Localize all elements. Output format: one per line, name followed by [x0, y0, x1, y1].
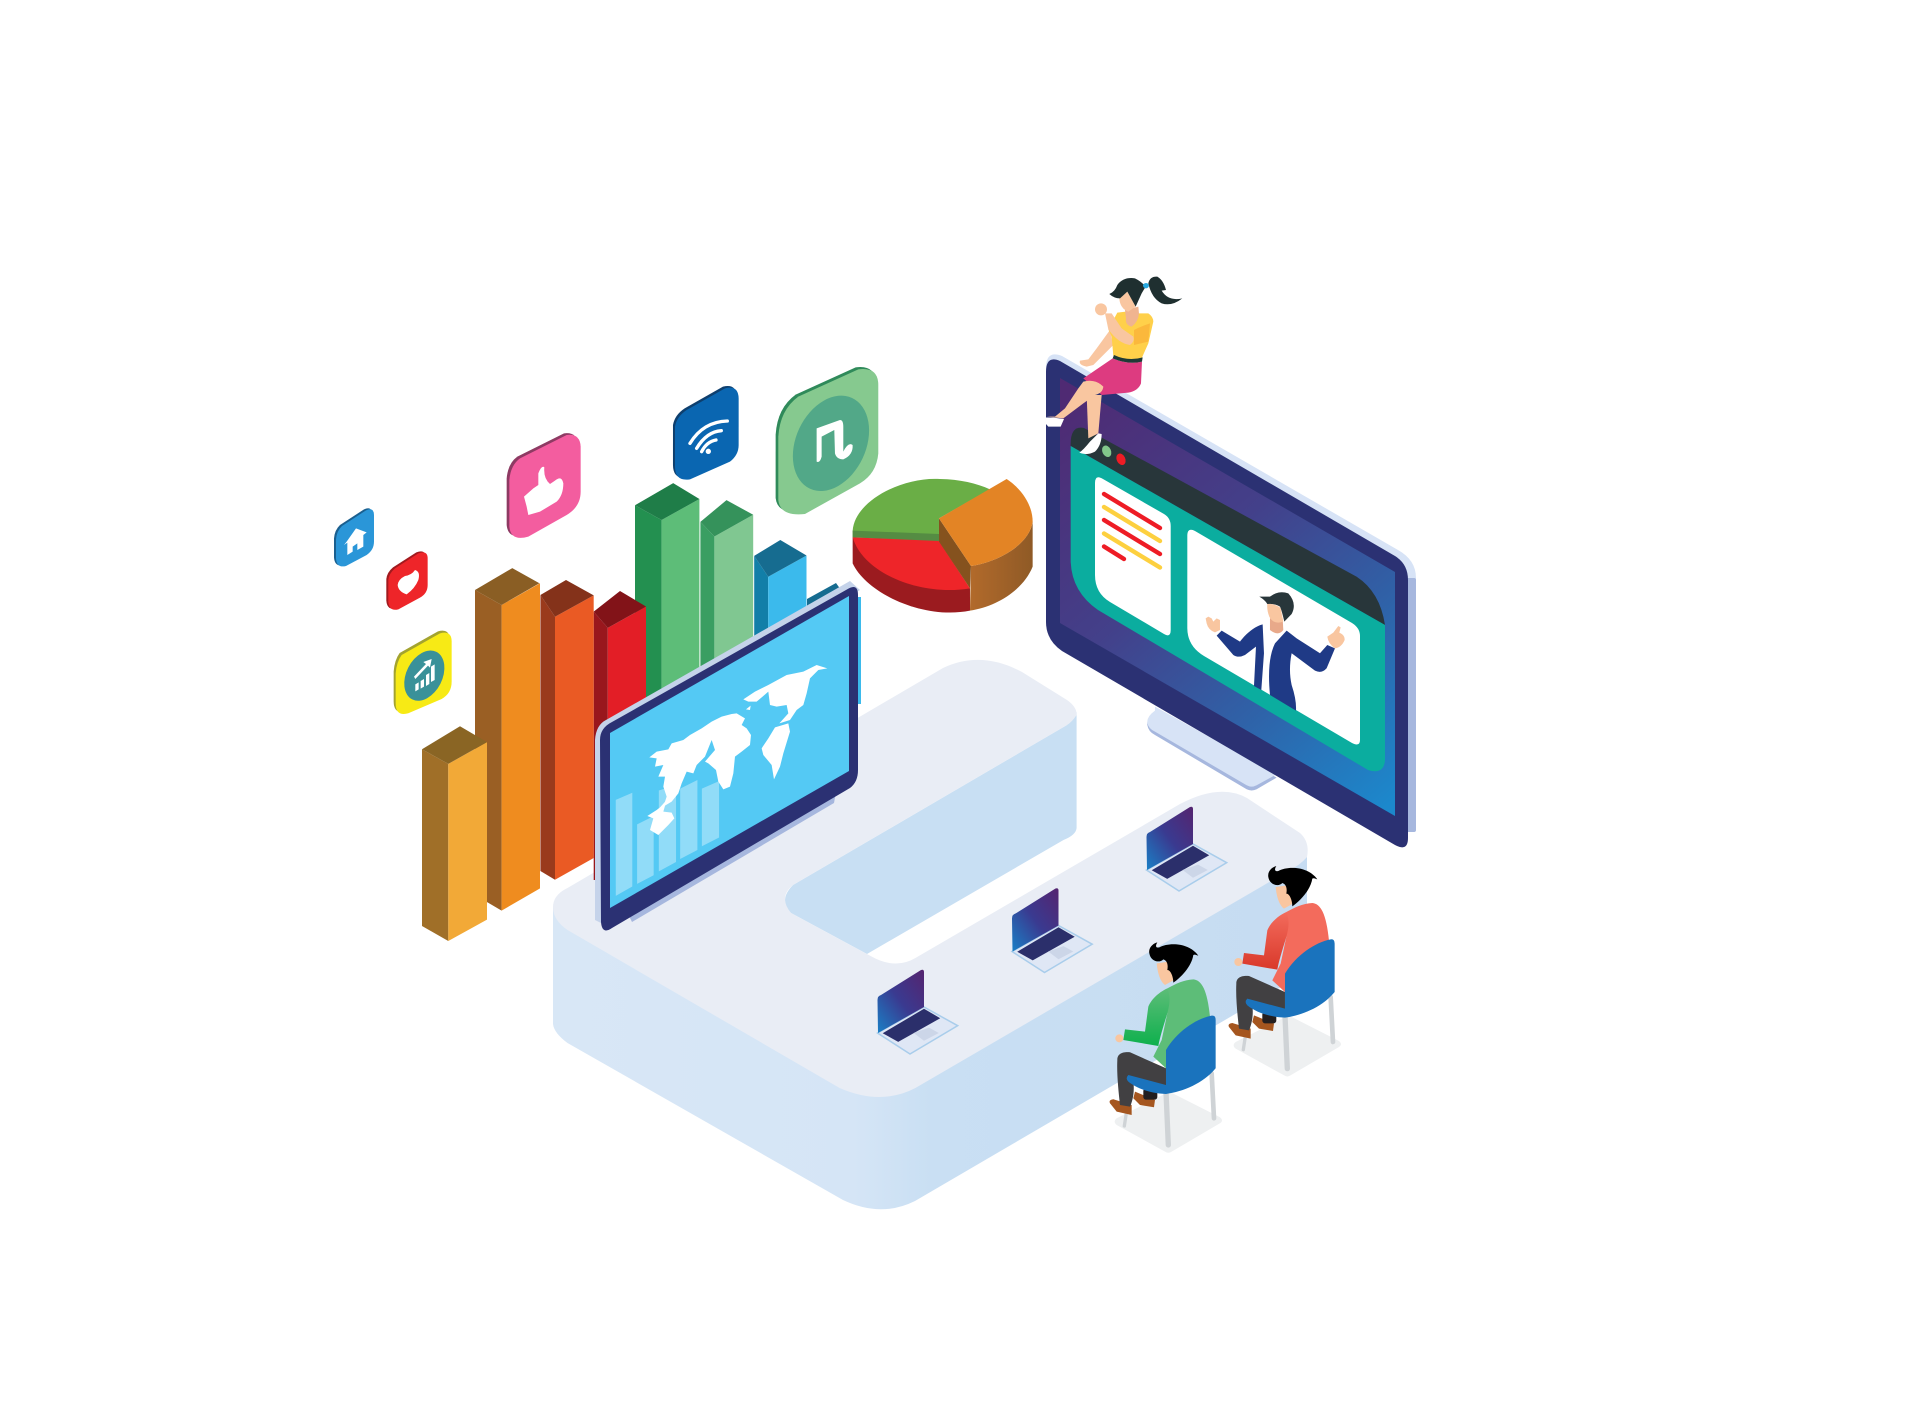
presenter — [1206, 592, 1345, 711]
monitor teal panel — [1071, 446, 1385, 771]
text card — [1095, 477, 1171, 635]
icon: heart — [386, 551, 428, 610]
laptop 3 — [1146, 807, 1227, 891]
icon: thumbs up — [507, 433, 581, 538]
bar: amber — [422, 726, 487, 941]
tablet chart bars — [616, 780, 719, 896]
laptop 1 — [878, 970, 958, 1054]
icon: home — [334, 508, 374, 566]
large monitor — [1046, 354, 1416, 847]
bar: blue — [754, 540, 806, 780]
bar chart — [422, 483, 841, 941]
laptop 2 — [1012, 888, 1092, 972]
bar: deep orange — [540, 580, 594, 880]
student in red shirt on chair — [1229, 866, 1341, 1076]
world map — [647, 665, 827, 835]
monitor title bar — [1071, 428, 1385, 625]
window buttons — [1100, 444, 1127, 467]
bar: orange — [475, 568, 540, 911]
bar: light green — [700, 500, 753, 820]
back tablet edge — [807, 583, 841, 612]
woman sitting on monitor — [1040, 277, 1182, 454]
icon: music — [776, 367, 884, 514]
U-shaped table — [553, 660, 1308, 1209]
icon: growth chart — [394, 631, 452, 714]
monitor stand — [1147, 707, 1277, 790]
icon: wifi — [673, 386, 739, 480]
tablet with world map — [595, 581, 861, 930]
pie chart — [853, 479, 1033, 613]
bar: green — [635, 483, 699, 830]
video card — [1187, 530, 1360, 744]
student in green shirt on chair — [1110, 942, 1222, 1153]
bar: red — [594, 591, 646, 880]
